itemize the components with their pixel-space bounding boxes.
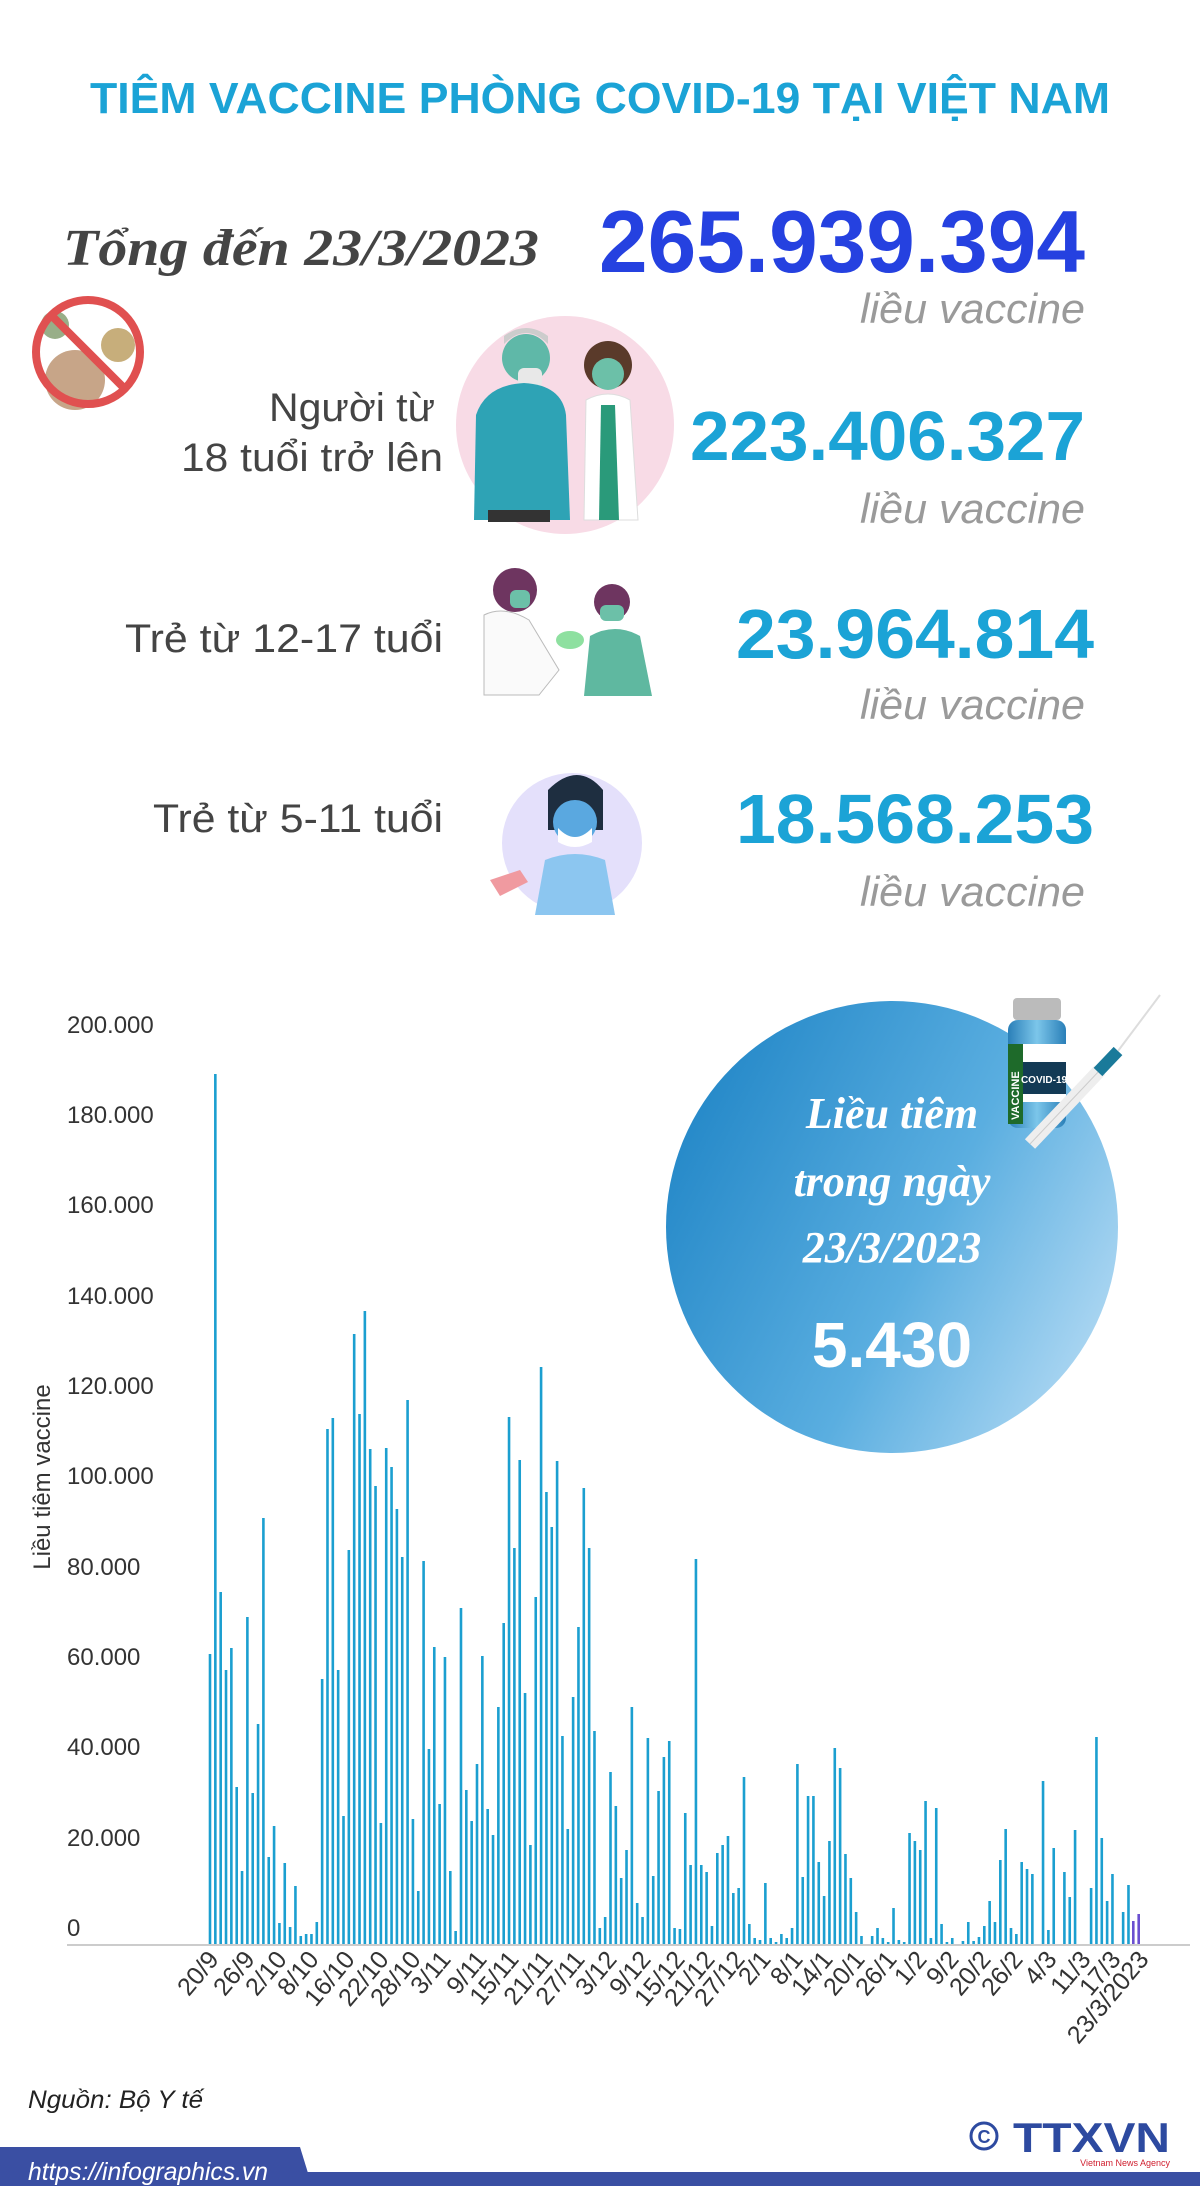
icon: vaccine vial and syringe: VACCINE <box>1010 1071 1022 1120</box>
y axis labels: 40.000 <box>67 1734 140 1761</box>
x axis labels: 9/2 <box>921 1946 965 1990</box>
x axis labels: 15/11 <box>464 1946 525 2010</box>
callout circle: today's doses: 23/3/2023 <box>802 1223 981 1272</box>
illustration: adults vaccination <box>456 316 674 534</box>
total number: 265.939.394 <box>599 192 1085 291</box>
x axis labels: 8/10 <box>272 1946 325 2001</box>
x axis labels: 27/11 <box>530 1946 591 2010</box>
x axis labels: 20/9 <box>172 1946 225 2001</box>
x axis labels: 26/2 <box>976 1946 1029 2001</box>
x axis labels: 11/3 <box>1045 1946 1097 2000</box>
footer bar <box>0 2147 1200 2186</box>
x axis labels: 20/1 <box>818 1946 871 2001</box>
number: 12-17: liều vaccine <box>860 681 1085 728</box>
x axis labels: 22/10 <box>333 1946 395 2012</box>
y axis labels: 80.000 <box>67 1554 140 1581</box>
icon: no virus <box>36 300 140 410</box>
label: 12-17: Trẻ từ 12-17 tuổi <box>125 617 443 661</box>
x axis labels <box>172 1946 1155 2049</box>
y axis labels: 200.000 <box>67 1012 154 1039</box>
x axis labels: 2/10 <box>240 1946 293 2001</box>
bars <box>210 1074 1139 1944</box>
y axis labels: 180.000 <box>67 1102 154 1129</box>
logo: TTXVN: C <box>978 2127 990 2147</box>
number: 5-11: 18.568.253 <box>736 780 1094 858</box>
x axis labels: 21/11 <box>498 1946 559 2010</box>
x axis labels: 28/10 <box>365 1946 427 2012</box>
label: adults <box>181 386 443 480</box>
logo: TTXVN: TTXVN <box>1013 2114 1170 2161</box>
y axis labels: 160.000 <box>67 1192 154 1219</box>
chart: daily doses <box>29 1012 1190 2049</box>
callout circle: today's doses: 5.430 <box>812 1309 972 1381</box>
x axis labels: 9/12 <box>604 1946 657 2001</box>
x axis labels: 15/12 <box>629 1946 691 2012</box>
x axis labels: 3/11 <box>405 1946 457 2000</box>
total number: liều vaccine <box>860 285 1085 332</box>
x axis labels: 4/3 <box>1019 1946 1063 1990</box>
number: 12-17: 23.964.814 <box>736 595 1094 673</box>
x axis labels: 20/2 <box>944 1946 997 2001</box>
number: adults: 223.406.327 <box>690 397 1085 475</box>
y axis labels: 0 <box>67 1915 80 1942</box>
callout circle: today's doses: trong ngày <box>794 1157 991 1206</box>
x axis labels: 8/1 <box>765 1946 809 1990</box>
total label: Tổng đến 23/3/2023 <box>63 220 539 277</box>
title: TIÊM VACCINE PHÒNG COVID-19 TẠI VIỆT NAM <box>90 73 1110 123</box>
y axis title: Liều tiêm vaccine <box>29 1384 56 1570</box>
x axis labels: 26/9 <box>208 1946 261 2001</box>
label: 5-11: Trẻ từ 5-11 tuổi <box>153 797 443 841</box>
x axis labels: 26/1 <box>850 1946 903 2001</box>
number: 5-11: liều vaccine <box>860 868 1085 915</box>
logo: TTXVN <box>971 2114 1170 2168</box>
y axis labels: 120.000 <box>67 1373 154 1400</box>
x axis labels: 16/10 <box>299 1946 361 2012</box>
number: 5-11 <box>736 780 1094 915</box>
x axis labels: 3/12 <box>570 1946 623 2001</box>
y axis labels <box>67 1012 154 1942</box>
callout circle: today's doses: Liều tiêm <box>805 1089 978 1138</box>
number: adults: liều vaccine <box>860 485 1085 532</box>
number: 12-17 <box>736 595 1094 728</box>
y axis labels: 60.000 <box>67 1644 140 1671</box>
x axis labels: 1/2 <box>889 1946 933 1990</box>
illustration: child vaccination <box>490 773 642 915</box>
x axis labels: 23/3/2023 <box>1062 1946 1155 2049</box>
label: adults: Người từ <box>269 386 435 430</box>
x axis labels: 2/1 <box>733 1946 777 1990</box>
x axis labels: 14/1 <box>786 1946 839 2001</box>
x axis labels: 27/12 <box>689 1946 751 2012</box>
callout circle: today's doses <box>666 1001 1118 1453</box>
x axis labels: 9/11 <box>441 1946 493 2000</box>
x axis labels: 17/3 <box>1074 1946 1127 2001</box>
x axis labels: 21/12 <box>659 1946 721 2012</box>
illustration: teen vaccination <box>484 568 652 696</box>
icon: vaccine vial and syringe: COVID-19 <box>1021 1075 1067 1086</box>
y axis labels: 20.000 <box>67 1825 140 1852</box>
label: adults: 18 tuổi trở lên <box>181 436 443 480</box>
icon: vaccine vial and syringe <box>1008 995 1160 1144</box>
footer bar: https://infographics.vn <box>28 2158 268 2186</box>
number: adults <box>690 397 1085 532</box>
logo: TTXVN: Vietnam News Agency <box>1080 2158 1170 2168</box>
y axis labels: 140.000 <box>67 1283 154 1310</box>
y axis labels: 100.000 <box>67 1463 154 1490</box>
source: Nguồn: Bộ Y tế <box>28 2086 205 2114</box>
